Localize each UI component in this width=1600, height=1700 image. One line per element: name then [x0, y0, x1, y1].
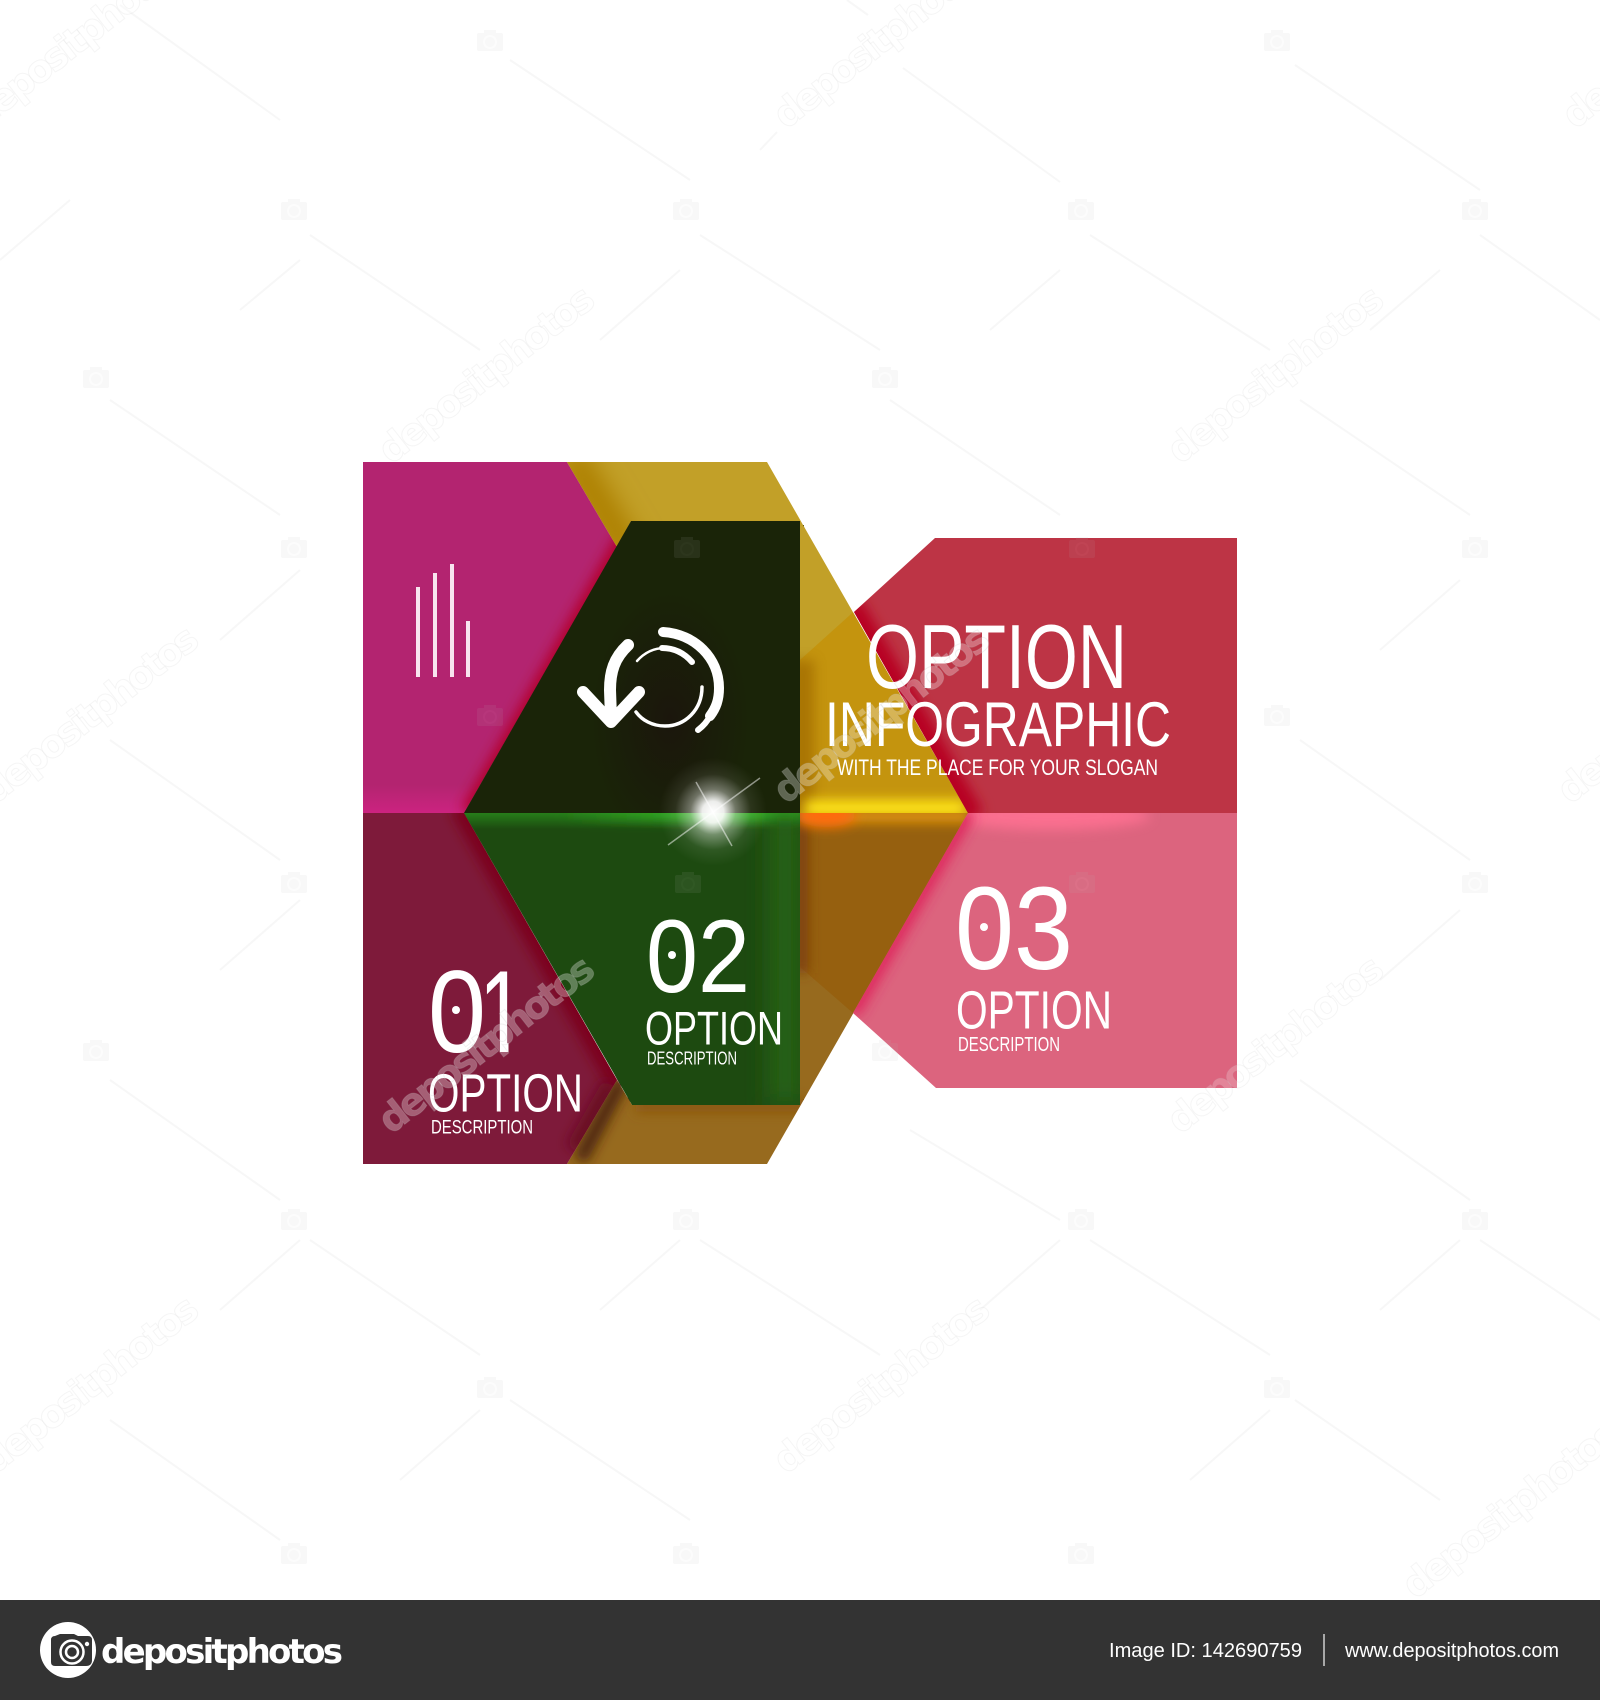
watermarks: depositphotos [369, 946, 603, 1142]
panel: dark green top [464, 521, 800, 813]
number dot [668, 951, 676, 959]
logo: camera badge [40, 1622, 96, 1678]
footer bar [0, 1600, 1600, 1700]
number 03: 03 [955, 863, 1073, 995]
icon: bar chart [416, 564, 470, 677]
panel: olive top fold [560, 455, 980, 816]
number dot [980, 923, 988, 931]
panel: maroon bottom left [363, 805, 625, 1164]
panel: green bottom [460, 806, 800, 1105]
panel: red top right [850, 538, 1237, 818]
option label: OPTION [956, 980, 1112, 1040]
panel seam underlay [363, 525, 1237, 1162]
option 01 [430, 970, 580, 1134]
title block [825, 607, 1171, 780]
option label: OPTION [428, 1064, 583, 1124]
number 02: 02 [646, 899, 750, 1015]
panel: pink bottom right [850, 802, 1237, 1088]
panel: orange bottom fold [560, 803, 970, 1164]
description: DESCRIPTION [958, 1034, 1060, 1056]
watermarks: depositphotos [369, 276, 603, 472]
number 0 of 01: 0 [428, 946, 486, 1077]
title: option: OPTION [866, 607, 1127, 708]
watermarks: depositphotos [764, 616, 998, 812]
panel: magenta top left [363, 462, 633, 813]
watermarks: depositphotos [764, 1286, 998, 1482]
number 1 of 01: 1 [479, 946, 525, 1077]
option label: OPTION [645, 1002, 783, 1054]
footer divider [1323, 1634, 1325, 1666]
number dot [452, 1006, 460, 1014]
option 02 [645, 899, 783, 1068]
option 03 [955, 863, 1112, 1056]
description: DESCRIPTION [647, 1048, 737, 1068]
logo wordmark: depositphotos [101, 1632, 343, 1672]
title: infographic: INFOGRAPHIC [825, 690, 1171, 760]
watermarks: depositphotos [1158, 276, 1392, 472]
watermarks: depositphotos [1158, 946, 1392, 1142]
icon: refresh arrow [583, 632, 719, 730]
slogan: WITH THE PLACE FOR YOUR SLOGAN [837, 755, 1158, 780]
website url: www.depositphotos.com [1344, 1640, 1559, 1662]
image id: Image ID: 142690759 [1109, 1640, 1302, 1662]
light flare [659, 758, 767, 866]
watermark camera icons [83, 30, 1488, 1564]
description: DESCRIPTION [431, 1118, 533, 1138]
